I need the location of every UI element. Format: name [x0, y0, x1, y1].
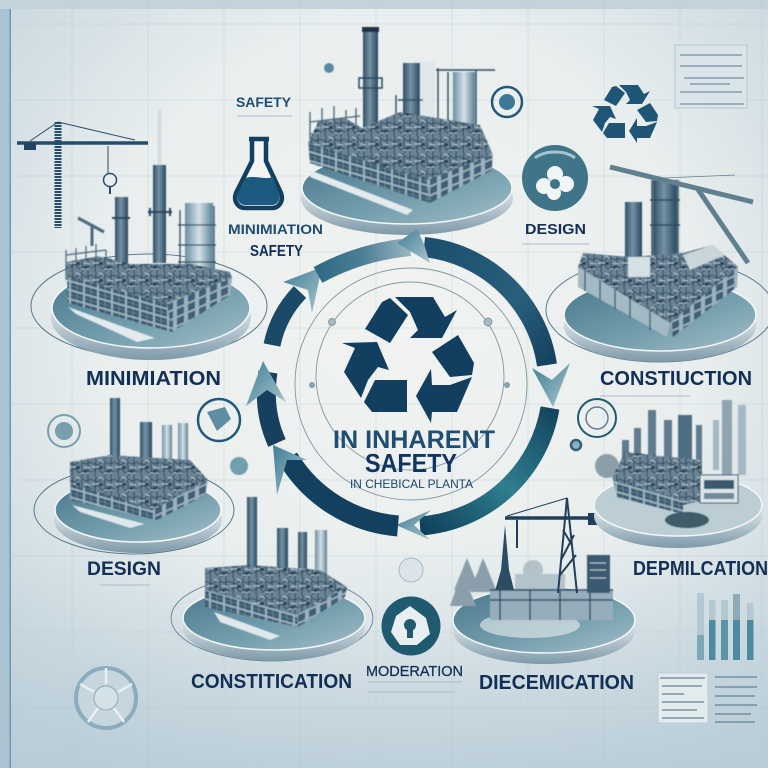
- label: design top: DESIGN: [525, 222, 586, 238]
- trees: [450, 558, 565, 606]
- ring segment upper left: [272, 292, 300, 345]
- icon: top recycle: [592, 85, 658, 143]
- icon: moderation circle: [382, 596, 440, 656]
- icon: faded gear circle: [76, 668, 136, 728]
- label: design lower left: DESIGN: [87, 558, 161, 580]
- outline ring: [546, 258, 768, 362]
- small ring icons: [48, 63, 616, 582]
- ring segment left: [266, 372, 277, 443]
- arrowhead right: [532, 363, 570, 407]
- spire: [493, 525, 516, 598]
- panel: left plant, minimisation: [31, 165, 267, 360]
- title: IN INHARENT: [333, 426, 495, 454]
- label: minimiation left: MINIMIATION: [86, 368, 221, 390]
- document sketch: top right: [675, 45, 747, 108]
- ring segment bottom left: [288, 458, 398, 526]
- arrowhead upper left: [283, 267, 322, 313]
- label: constitication: CONSTITICATION: [191, 671, 352, 693]
- small rule lines under labels: [100, 116, 690, 692]
- label: safety top: SAFETY: [236, 95, 291, 110]
- labels: [86, 95, 768, 694]
- icon: design circle: [522, 145, 588, 211]
- platform: [453, 587, 635, 664]
- platform: [171, 575, 373, 661]
- icon: flask: [235, 139, 282, 208]
- factory: [66, 165, 232, 342]
- title: IN CHEBICAL PLANTA: [350, 477, 473, 491]
- panel: lower-left plant, design: [34, 398, 234, 554]
- smoke: [158, 110, 161, 165]
- panel: right plant, construction: [546, 167, 768, 362]
- chart: bars: [697, 593, 754, 660]
- arrowhead top: [397, 229, 430, 263]
- crane arm: [610, 167, 753, 263]
- crane: top left: [17, 122, 148, 228]
- label: diecemication: DIECEMICATION: [479, 672, 634, 694]
- platform: [564, 279, 756, 362]
- platform: [594, 474, 762, 548]
- platform: [31, 254, 267, 360]
- label: safety under minimisation: SAFETY: [250, 243, 304, 260]
- title: SAFETY: [365, 448, 457, 478]
- arrowhead bottom: [396, 510, 431, 540]
- low building: [490, 555, 613, 620]
- factory block: [612, 452, 738, 528]
- tree: [595, 454, 619, 478]
- platform: [34, 466, 234, 554]
- towers: [622, 400, 746, 480]
- arrowhead left: [246, 361, 286, 406]
- factory: [578, 180, 738, 337]
- panel: bottom-middle plant, constitication: [171, 497, 373, 661]
- label: construction right: CONSTIUCTION: [600, 368, 752, 390]
- panel: right-lower plant, depmilcation: [594, 400, 762, 548]
- title: [333, 426, 495, 491]
- factory: [308, 27, 495, 215]
- arrowhead lower left: [273, 445, 307, 495]
- icon: central recycle symbol: [342, 297, 474, 423]
- ring segment top: [318, 247, 410, 275]
- factory: [70, 398, 208, 528]
- crane: [505, 498, 603, 593]
- ring segment top right: [424, 247, 547, 365]
- factory: [205, 497, 347, 640]
- inner thin circles: [295, 268, 527, 500]
- document sketch: bottom right: [658, 673, 757, 723]
- label: moderation: MODERATION: [366, 663, 463, 680]
- label: minimisation safety: MINIMIATION: [228, 221, 323, 237]
- platform: [301, 152, 513, 235]
- panel: top plant: [301, 27, 513, 235]
- big cycle ring with arrows: [246, 229, 570, 540]
- panel: bottom-right plant, diecemication: [450, 498, 635, 664]
- ring segment bottom right: [420, 408, 550, 526]
